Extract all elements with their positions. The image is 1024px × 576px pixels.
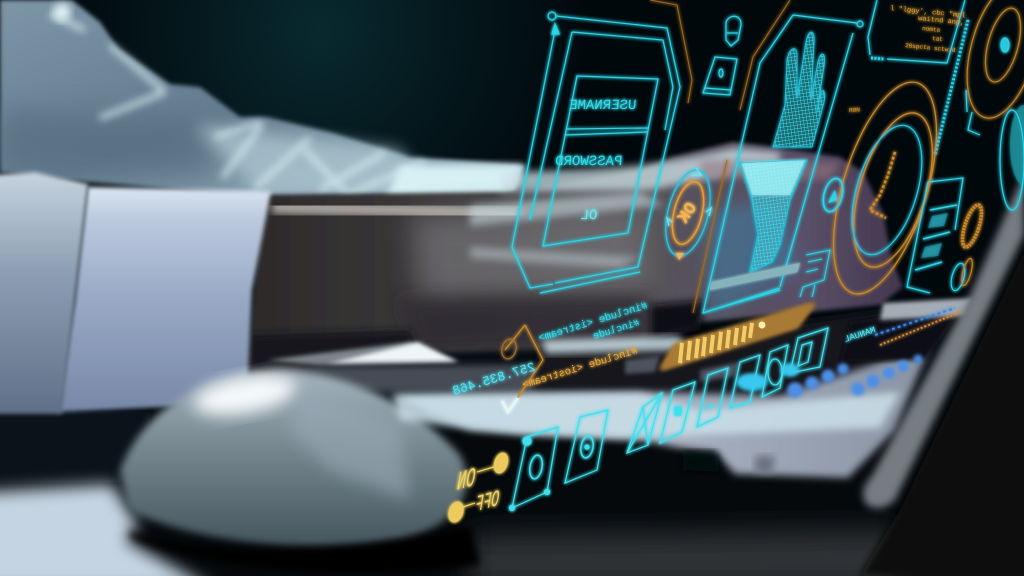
text: include line three: #include <iostream> [521,345,639,392]
panel: small form and orange cog [907,178,985,293]
text: on: ON [455,462,478,499]
orange radar top right [935,0,1024,155]
text: readout lines: l "lggy', cbc "mpl [890,5,966,21]
text: readout lines [890,5,966,54]
text: ok: OK [674,200,702,228]
lower sleeve [0,172,88,414]
dark keyboard shadow zone [530,300,960,405]
paper under hand [262,342,540,394]
text: include line two: #include [592,317,641,343]
hand wireframe [740,32,825,272]
cyan gauge right edge [1000,105,1024,210]
shirt cuff [58,187,271,412]
text: ok button: OL [580,208,598,224]
laptop screen edge [860,173,1024,576]
keyboard keys blurred [625,298,973,474]
diamond check marker [500,325,543,412]
ok dial [658,165,718,261]
text: readout lines: tat [932,35,943,43]
holographic HUD [447,0,1024,524]
laptop keyboard deck [392,345,930,478]
text: ip address: 257.835.468 [451,359,537,399]
text: include line one: #include <istream> [537,300,649,345]
orange radar centre [813,71,957,305]
panel: login form [512,12,680,293]
circular badge by knuckle [820,176,846,214]
panel: hand scan [703,15,863,313]
bright streak above code [542,336,686,354]
on off switch [447,452,510,524]
bright streak on keyboard edge [393,392,900,438]
blue keyboard lights [738,356,921,396]
progress bar [660,303,815,370]
icon: user with laptop [703,16,741,95]
text: password: PASSWORD [554,154,623,170]
text: readout lines: nomta [922,25,941,34]
icon: small circuit card [800,250,830,297]
text: manual keyboard label: MANUAL [843,325,877,345]
text: off: OFF [473,486,501,519]
computer mouse [120,368,480,573]
panel: code lines [451,300,649,399]
shirt sleeve upper arm [0,0,525,200]
table surface [0,412,1024,576]
orange connector lines [650,0,790,313]
text: manual keyboard label [843,308,960,345]
text: username: USERNAME [568,98,637,114]
text: readout lines: 20spcta sctw.d [905,42,956,54]
panel: orange text readout [868,0,966,63]
app icon row [510,328,828,510]
text: readout lines: waitnd anp, [918,15,965,28]
forearm and hand [248,142,903,368]
label: small code block: R0N [849,106,860,114]
